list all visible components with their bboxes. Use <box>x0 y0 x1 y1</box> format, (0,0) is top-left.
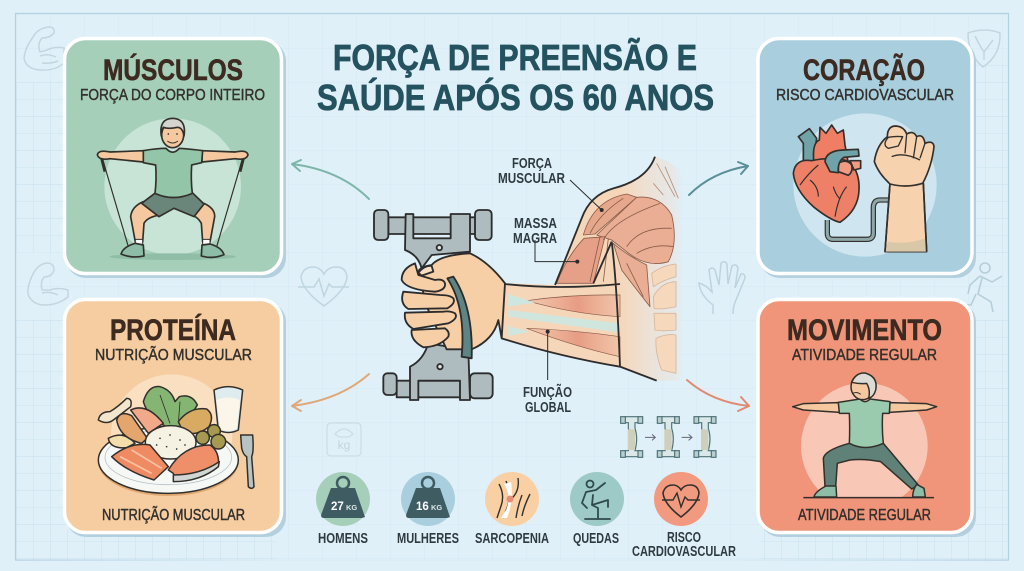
stat: mulheres 16 kg <box>397 472 459 547</box>
torso and arm <box>502 157 683 381</box>
stat: mulheres 16 kg: 16 <box>416 501 429 513</box>
label: força muscular: MUSCULAR <box>498 171 565 187</box>
panel: coração <box>758 38 976 278</box>
subheading: risco cardiovascular: RISCO CARDIOVASCULAR <box>776 87 954 104</box>
label: força muscular <box>498 156 565 187</box>
title: FORÇA DE PREENSÃO E <box>333 36 697 78</box>
ghost icon: biceps lower left <box>28 263 68 305</box>
caption: atividade regular: ATIVIDADE REGULAR <box>798 507 931 524</box>
ghost icon: shield <box>968 30 1000 67</box>
label: sarcopenia: SARCOPENIA <box>475 531 549 547</box>
central illustration: hand gripper and arm anatomy <box>374 157 683 400</box>
ghost icon: hand <box>699 262 745 314</box>
ghost icon: runner <box>960 263 1002 312</box>
icon row: grippers sequence <box>621 417 716 457</box>
arrow: to músculos <box>292 160 369 199</box>
stat: homens 27 kg <box>316 472 370 547</box>
label: homens: HOMENS <box>318 531 368 547</box>
leader lines <box>535 180 602 380</box>
stat: homens 27 kg: 27 <box>331 501 344 513</box>
ghost icon: scale <box>327 423 361 456</box>
gripper bottom <box>383 343 493 400</box>
label: massa magra: MASSA <box>514 216 557 232</box>
label: massa magra <box>513 216 557 247</box>
heading: movimento: MOVIMENTO <box>787 314 942 347</box>
label: função global: FUNÇÃO <box>523 383 572 401</box>
illustration: woman in warrior pose <box>793 373 937 498</box>
neck muscles <box>653 163 678 198</box>
palm <box>418 253 505 349</box>
panel: movimento <box>758 300 976 537</box>
ghost icon: scale: kg <box>338 438 350 452</box>
illustration: plate of food <box>98 374 254 496</box>
label: quedas: QUEDAS <box>573 531 619 547</box>
forearm muscles <box>508 294 620 357</box>
ghost icon: biceps top left <box>24 27 64 70</box>
stat: risco cardiovascular: CARDIOVASCULAR <box>632 544 736 560</box>
fingers <box>402 263 456 347</box>
subheading: nutrição muscular: NUTRIÇÃO MUSCULAR <box>95 344 252 364</box>
heading: músculos: MÚSCULOS <box>103 53 243 87</box>
stat: sarcopenia <box>475 472 549 547</box>
outlines <box>502 157 657 381</box>
subheading: força do corpo inteiro: FORÇA DO CORPO INTEIRO <box>80 87 265 104</box>
stat: risco cardiovascular <box>632 472 736 560</box>
stat: homens 27 kg: KG <box>346 503 357 512</box>
label: função global: GLOBAL <box>525 400 571 416</box>
heading: coração: CORAÇÃO <box>803 53 925 87</box>
muscles: shoulder, chest and arm <box>557 194 676 373</box>
gripper top <box>374 210 492 268</box>
caption: nutrição muscular: NUTRIÇÃO MUSCULAR <box>102 507 245 524</box>
arrow: to movimento <box>687 380 749 411</box>
panel: músculos <box>64 38 286 278</box>
grip handle <box>447 277 472 358</box>
illustration: heart, tube and fist <box>793 113 937 257</box>
stat: mulheres 16 kg: KG <box>431 503 442 512</box>
label: massa magra: MAGRA <box>513 231 557 247</box>
title <box>317 36 714 118</box>
arrow: to proteína <box>292 374 369 411</box>
label: função global <box>523 383 572 416</box>
title: SAÚDE APÓS OS 60 ANOS <box>317 76 714 118</box>
panel: proteína <box>64 300 286 537</box>
stat: quedas <box>570 472 624 547</box>
illustration: man squatting with bands <box>97 118 248 260</box>
ghost icon: heart pulse <box>298 267 349 306</box>
label: mulheres: MULHERES <box>397 531 459 547</box>
heading: proteína: PROTEÍNA <box>110 313 236 347</box>
arrow: to coração <box>689 162 748 195</box>
label: risco cardiovascular: RISCO <box>667 530 701 546</box>
label: força muscular: FORÇA <box>512 156 552 172</box>
subheading: atividade regular: ATIVIDADE REGULAR <box>792 347 937 364</box>
